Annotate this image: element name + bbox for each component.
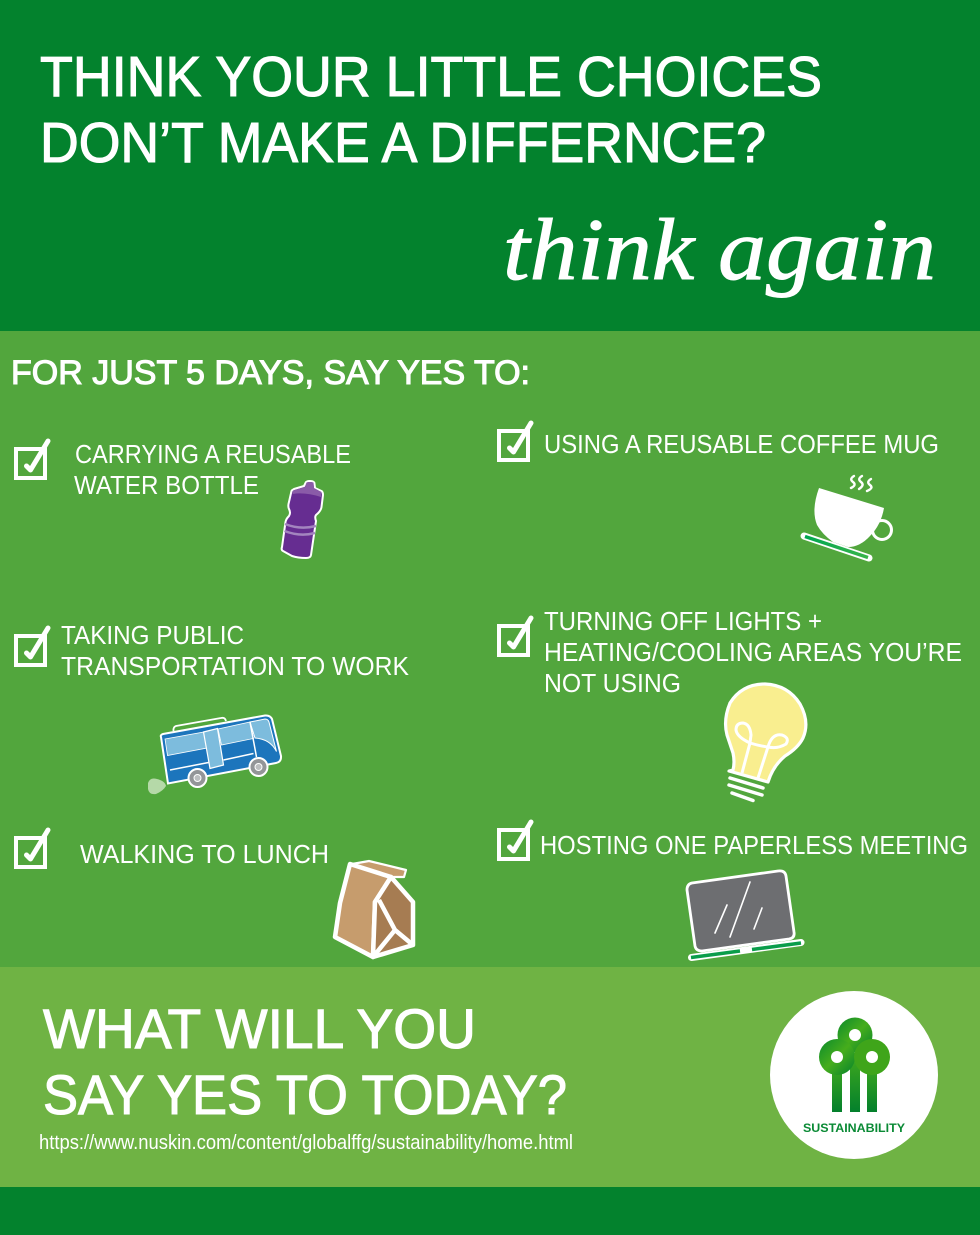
panel: header band: [0, 0, 980, 331]
icon: checkbox: [499, 618, 531, 655]
icon: checkbox: [16, 441, 48, 478]
text: lights: [544, 606, 962, 698]
text: walking to lunch: WALKING TO LUNCH: [80, 839, 329, 869]
logo wordmark: SUSTAINABILITY: [803, 1121, 905, 1135]
text: public transportation: [61, 620, 410, 681]
icon: checkbox: [499, 822, 531, 859]
logo tree crowns: [819, 1018, 890, 1075]
item: walking to lunch: [16, 830, 413, 957]
item: reusable coffee mug: [499, 423, 939, 558]
logo: sustainability: [770, 991, 938, 1159]
panel: checklist band: [0, 331, 980, 967]
item: reusable water bottle: [16, 439, 351, 558]
icon: checkbox: [16, 628, 48, 665]
item: paperless meeting: [499, 822, 968, 958]
logo stems: [832, 1060, 877, 1112]
title: [40, 45, 822, 175]
text: lights: HEATING/COOLING AREAS YOU’RE: [544, 637, 962, 667]
closing question: [43, 997, 567, 1126]
closing question: SAY YES TO TODAY?: [43, 1063, 567, 1126]
title: DON’T MAKE A DIFFERNCE?: [40, 111, 766, 175]
item: turning off lights: [499, 606, 962, 800]
text: public transportation: TRANSPORTATION TO WORK: [61, 651, 410, 681]
text: public transportation: TAKING PUBLIC: [61, 620, 244, 650]
panel: closing band: [0, 967, 980, 1187]
panel: footer band: [0, 1187, 980, 1235]
exhaust puff: [148, 778, 166, 794]
icon: light bulb: [726, 684, 806, 800]
text: water bottle: [74, 439, 351, 500]
icon: bus: [148, 715, 281, 794]
icon: paper bag: [335, 861, 413, 957]
icon: water bottle: [282, 481, 323, 558]
icon: checkbox: [16, 830, 48, 867]
section heading: FOR JUST 5 DAYS, SAY YES TO:: [11, 354, 530, 392]
text: water bottle: CARRYING A REUSABLE: [75, 439, 351, 469]
icon: laptop: [687, 871, 801, 958]
script tagline: think again: [503, 202, 936, 299]
text: lights: TURNING OFF LIGHTS +: [544, 606, 822, 636]
text: coffee mug: USING A REUSABLE COFFEE MUG: [544, 429, 939, 459]
title: THINK YOUR LITTLE CHOICES: [40, 45, 822, 109]
url: https://www.nuskin.com/content/globalffg/sustainability/home.html: [39, 1132, 573, 1154]
item: public transportation: [16, 620, 410, 794]
text: water bottle: WATER BOTTLE: [74, 470, 259, 500]
text: lights: NOT USING: [544, 668, 681, 698]
icon: coffee mug: [804, 476, 892, 558]
closing question: WHAT WILL YOU: [43, 997, 476, 1060]
icon: checkbox: [499, 423, 531, 460]
